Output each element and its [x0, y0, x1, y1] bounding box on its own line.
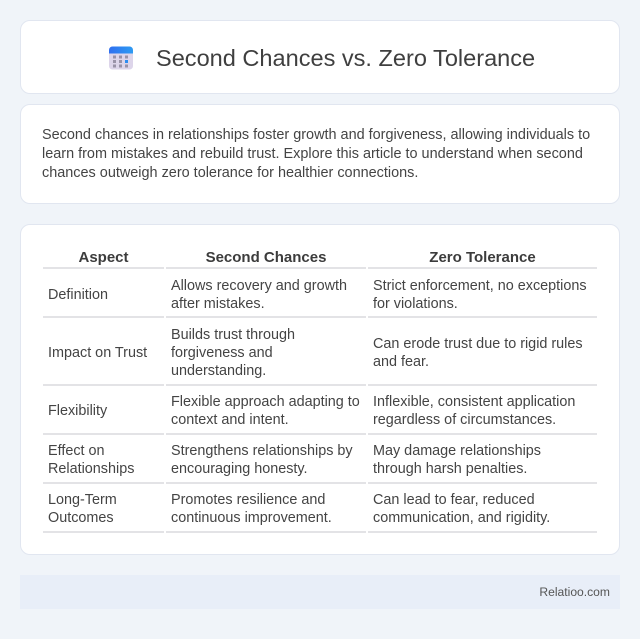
row: definition: after mistakes. — [171, 296, 265, 312]
intro text: chances outweigh zero tolerance for healthier connections. — [42, 165, 418, 181]
row: effect on relationships: encouraging honesty. — [171, 461, 308, 477]
row: long-term outcomes: Long-Term — [48, 492, 117, 508]
row: effect on relationships: Effect on — [48, 443, 105, 459]
comparison table panel — [20, 224, 620, 555]
table header: zero tolerance: Zero Tolerance — [429, 249, 536, 266]
row: flexibility: context and intent. — [171, 412, 289, 428]
row: long-term outcomes: Outcomes — [48, 510, 114, 526]
row: impact on trust: Builds trust through — [171, 327, 295, 343]
row: impact on trust: understanding. — [171, 363, 266, 379]
row: impact on trust: forgiveness and — [171, 345, 273, 361]
header panel — [20, 20, 620, 94]
row: flexibility: Inflexible, consistent application — [373, 394, 575, 410]
row: long-term outcomes — [48, 492, 550, 526]
row: effect on relationships: May damage relationships — [373, 443, 541, 459]
row: definition: Allows recovery and growth — [171, 278, 347, 294]
table header: aspect: Aspect — [78, 249, 129, 266]
row: long-term outcomes: Can lead to fear, reduced — [373, 492, 535, 508]
row: definition: Strict enforcement, no exceptions — [373, 278, 587, 294]
row: effect on relationships: Strengthens relationships by — [171, 443, 353, 459]
row: flexibility: Flexible approach adapting to — [171, 394, 360, 410]
row: impact on trust: Can erode trust due to rigid rules — [373, 336, 583, 352]
row: definition: Definition — [48, 287, 108, 303]
intro text: learn from mistakes and rebuild trust. Explore this article to understand when second — [42, 146, 583, 162]
row: effect on relationships — [48, 443, 541, 477]
row: impact on trust: Impact on Trust — [48, 345, 147, 361]
row: flexibility: Flexibility — [48, 403, 107, 419]
row: impact on trust — [48, 327, 583, 379]
icon: calendar — [109, 46, 133, 70]
row: impact on trust: and fear. — [373, 354, 429, 370]
row: long-term outcomes: Promotes resilience and — [171, 492, 325, 508]
intro text — [42, 127, 590, 181]
title: Second Chances vs. Zero Tolerance — [156, 45, 535, 71]
row: long-term outcomes: communication, and rigidity. — [373, 510, 550, 526]
row: definition: for violations. — [373, 296, 458, 312]
row: effect on relationships: through harsh penalties. — [373, 461, 527, 477]
table header: second chances: Second Chances — [206, 249, 326, 266]
intro panel — [20, 104, 620, 204]
footer bar — [20, 575, 620, 609]
row: definition — [48, 278, 587, 312]
intro text: Second chances in relationships foster growth and forgiveness, allowing individuals to — [42, 127, 590, 143]
row: flexibility: regardless of circumstances. — [373, 412, 556, 428]
row: effect on relationships: Relationships — [48, 461, 134, 477]
footer text: Relatioo.com — [539, 585, 610, 599]
row: flexibility — [48, 394, 575, 428]
row: long-term outcomes: continuous improvement. — [171, 510, 332, 526]
